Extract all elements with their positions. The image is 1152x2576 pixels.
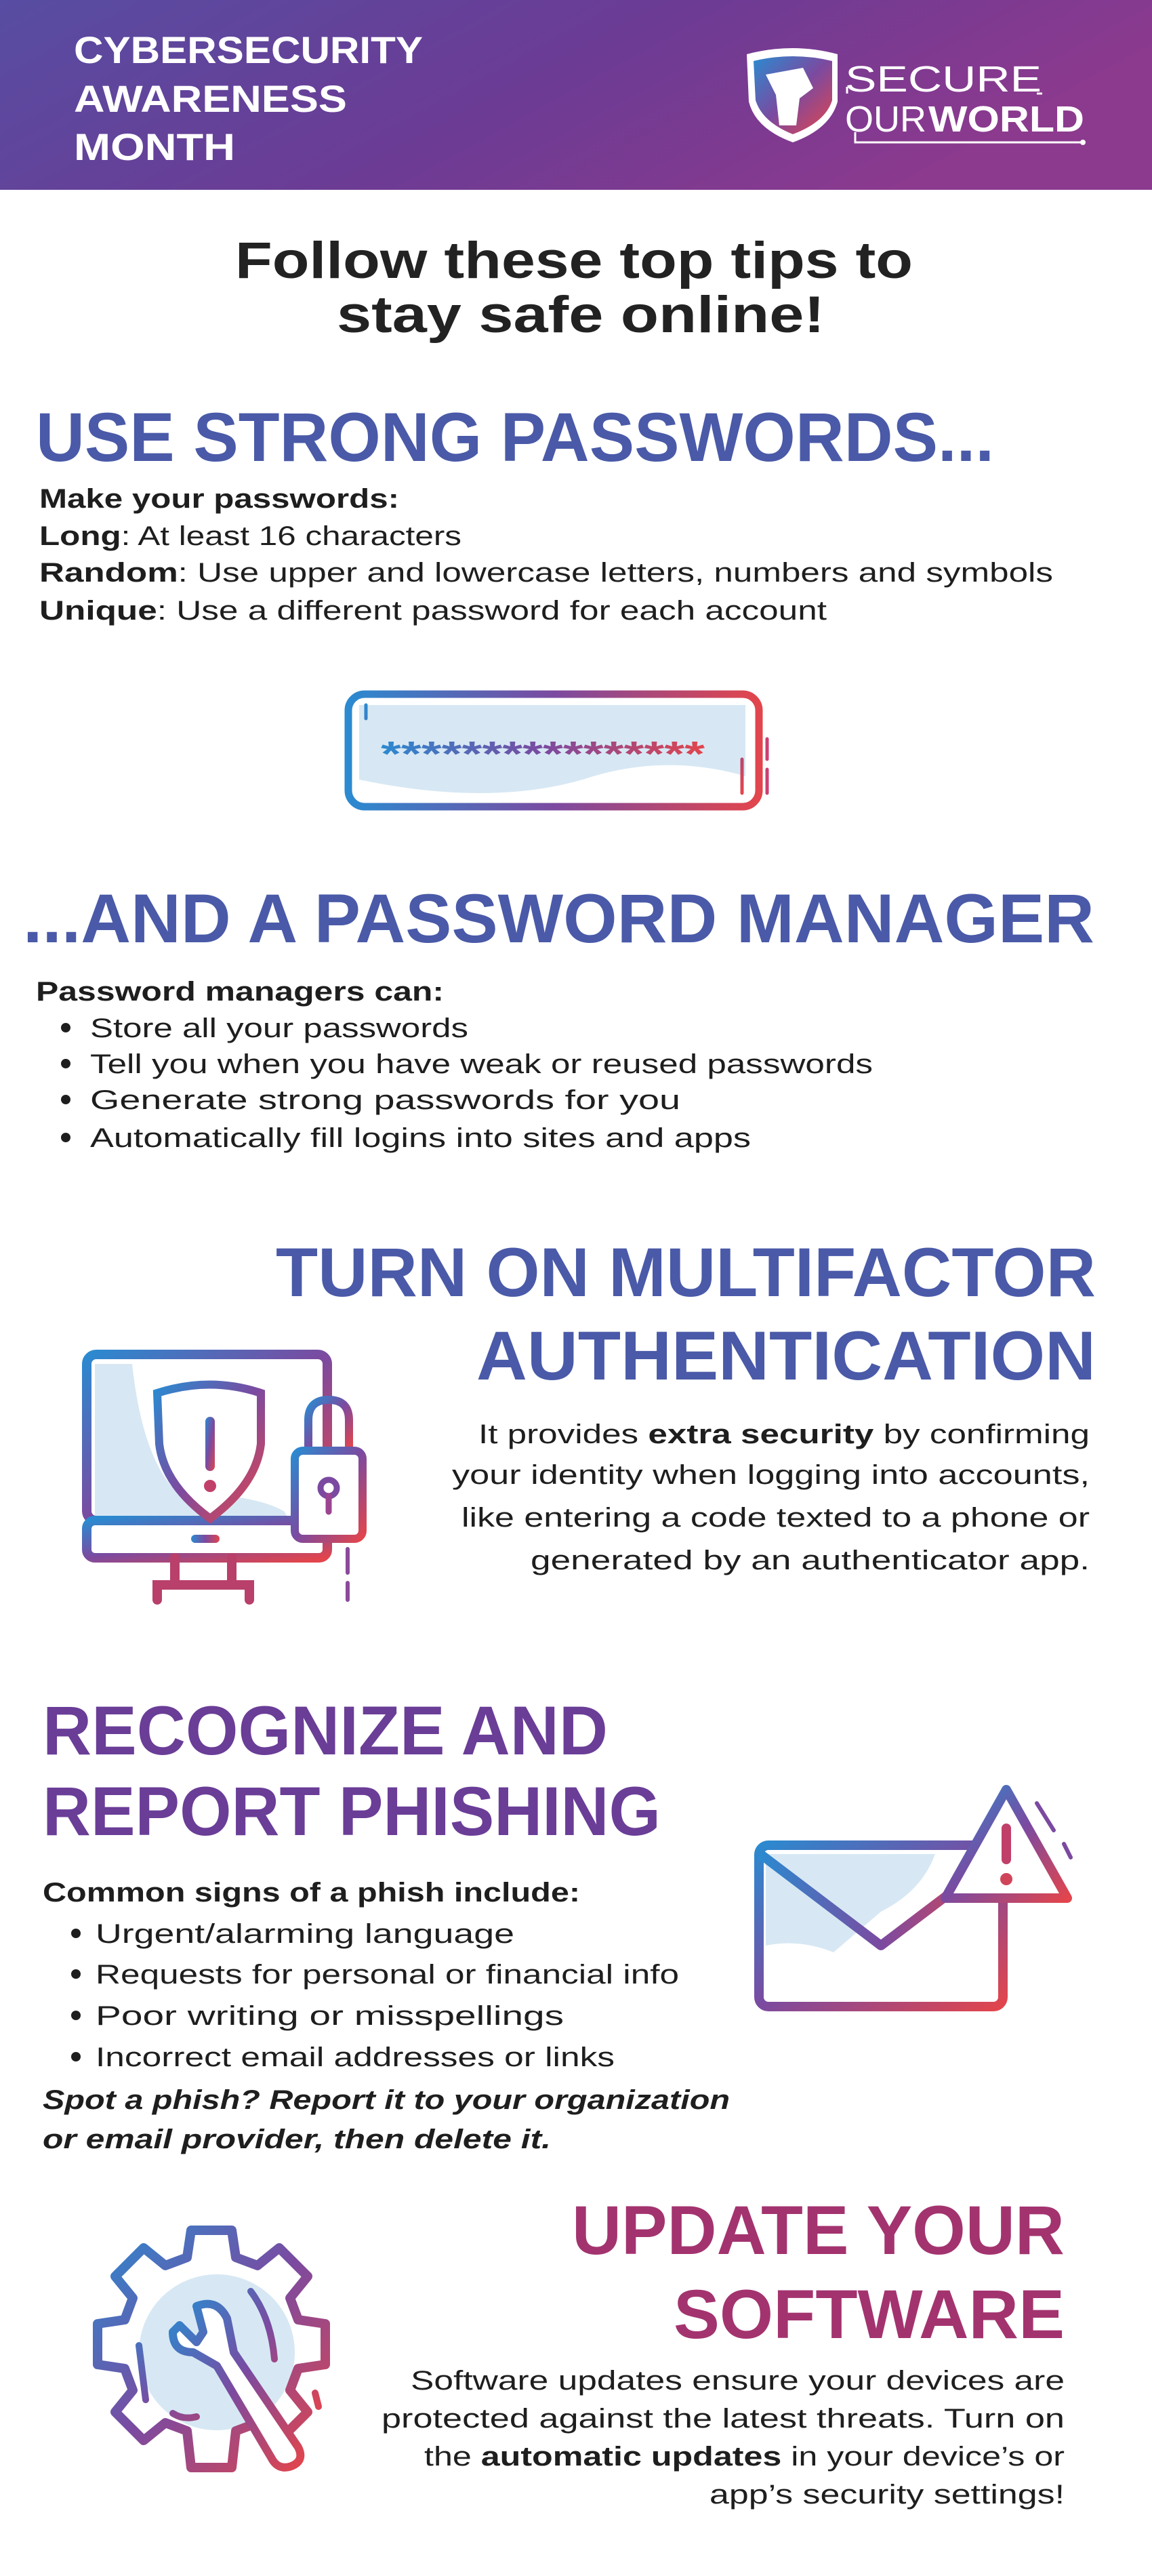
icon: gear with wrench (98, 2230, 325, 2468)
logo: secure our world: OUR (845, 99, 926, 140)
header banner (0, 0, 1152, 190)
heading: recognize and report phishing: REPORT PHISHING (43, 1773, 661, 1850)
list: signs of phishing: Common signs of a phish include: (43, 1878, 580, 1908)
list: password manager benefits: Automatically fill logins into sites and apps (90, 1123, 751, 1153)
heading: turn on multifactor authentication (276, 1234, 1096, 1394)
icon: monitor with shield and lock (87, 1354, 363, 1600)
icon: envelope with warning (759, 1790, 1071, 2007)
heading: update your software (572, 2192, 1065, 2353)
list: signs of phishing: or email provider, then delete it. (43, 2125, 551, 2154)
main title (235, 232, 913, 344)
heading: recognize and report phishing: RECOGNIZE AND (43, 1692, 608, 1769)
text: update description: protected against the latest threats. Turn on (382, 2404, 1065, 2434)
text: update description: the automatic updates in your device’s or (424, 2442, 1065, 2472)
heading: turn on multifactor authentication: TURN ON MULTIFACTOR (276, 1234, 1096, 1311)
list: password manager benefits: Store all your passwords (90, 1013, 468, 1043)
header title: MONTH (74, 125, 235, 168)
text: mfa description: It provides extra security by confirming (478, 1420, 1090, 1449)
heading: and a password manager: ...AND A PASSWORD MANAGER (23, 880, 1094, 957)
list: signs of phishing: Spot a phish? Report it to your organization (43, 2085, 730, 2115)
logo: secure our world: WORLD (928, 99, 1084, 140)
list: password manager benefits: Password managers can: (36, 977, 444, 1007)
heading: update your software: UPDATE YOUR (572, 2192, 1065, 2269)
heading: turn on multifactor authentication: AUTHENTICATION (476, 1317, 1096, 1394)
list: signs of phishing: Urgent/alarming language (96, 1919, 514, 1949)
text: password rules: Unique : Use a different password for each account (39, 596, 827, 626)
header title: CYBERSECURITY (74, 28, 423, 71)
logo: secure our world (747, 48, 1086, 145)
text: password rules (39, 484, 1053, 626)
main title: Follow these top tips to (235, 232, 913, 289)
text: mfa description: generated by an authenticator app. (531, 1546, 1090, 1575)
list: signs of phishing (43, 1878, 730, 2154)
heading: recognize and report phishing (43, 1692, 661, 1850)
list: password manager benefits: Tell you when you have weak or reused passwords (90, 1049, 873, 1079)
list: signs of phishing: Incorrect email addresses or links (96, 2042, 615, 2072)
icon: password field: **************** (381, 735, 705, 774)
text: password rules: Long : At least 16 characters (39, 521, 461, 551)
header title (74, 28, 423, 168)
text: mfa description: your identity when logging into accounts, (452, 1460, 1090, 1490)
text: mfa description (452, 1420, 1090, 1575)
heading: update your software: SOFTWARE (674, 2276, 1065, 2353)
text: update description: Software updates ensure your devices are (411, 2366, 1065, 2396)
list: signs of phishing: Requests for personal or financial info (96, 1960, 679, 1990)
list: password manager benefits (36, 977, 873, 1153)
text: update description: app’s security settings! (709, 2480, 1065, 2510)
heading: use strong passwords: USE STRONG PASSWORDS... (36, 399, 994, 476)
logo: secure our world: SECURE (845, 59, 1042, 100)
text: mfa description: like entering a code texted to a phone or (461, 1503, 1090, 1533)
header title: AWARENESS (74, 77, 347, 120)
text: password rules: Random : Use upper and lowercase letters, numbers and symbols (39, 558, 1053, 588)
list: signs of phishing: Poor writing or misspellings (96, 2001, 564, 2031)
text: update description (382, 2366, 1065, 2510)
text: password rules: Make your passwords: (39, 484, 399, 514)
list: password manager benefits: Generate strong passwords for you (90, 1085, 680, 1115)
icon: password field (348, 694, 767, 807)
main title: stay safe online! (337, 286, 825, 344)
